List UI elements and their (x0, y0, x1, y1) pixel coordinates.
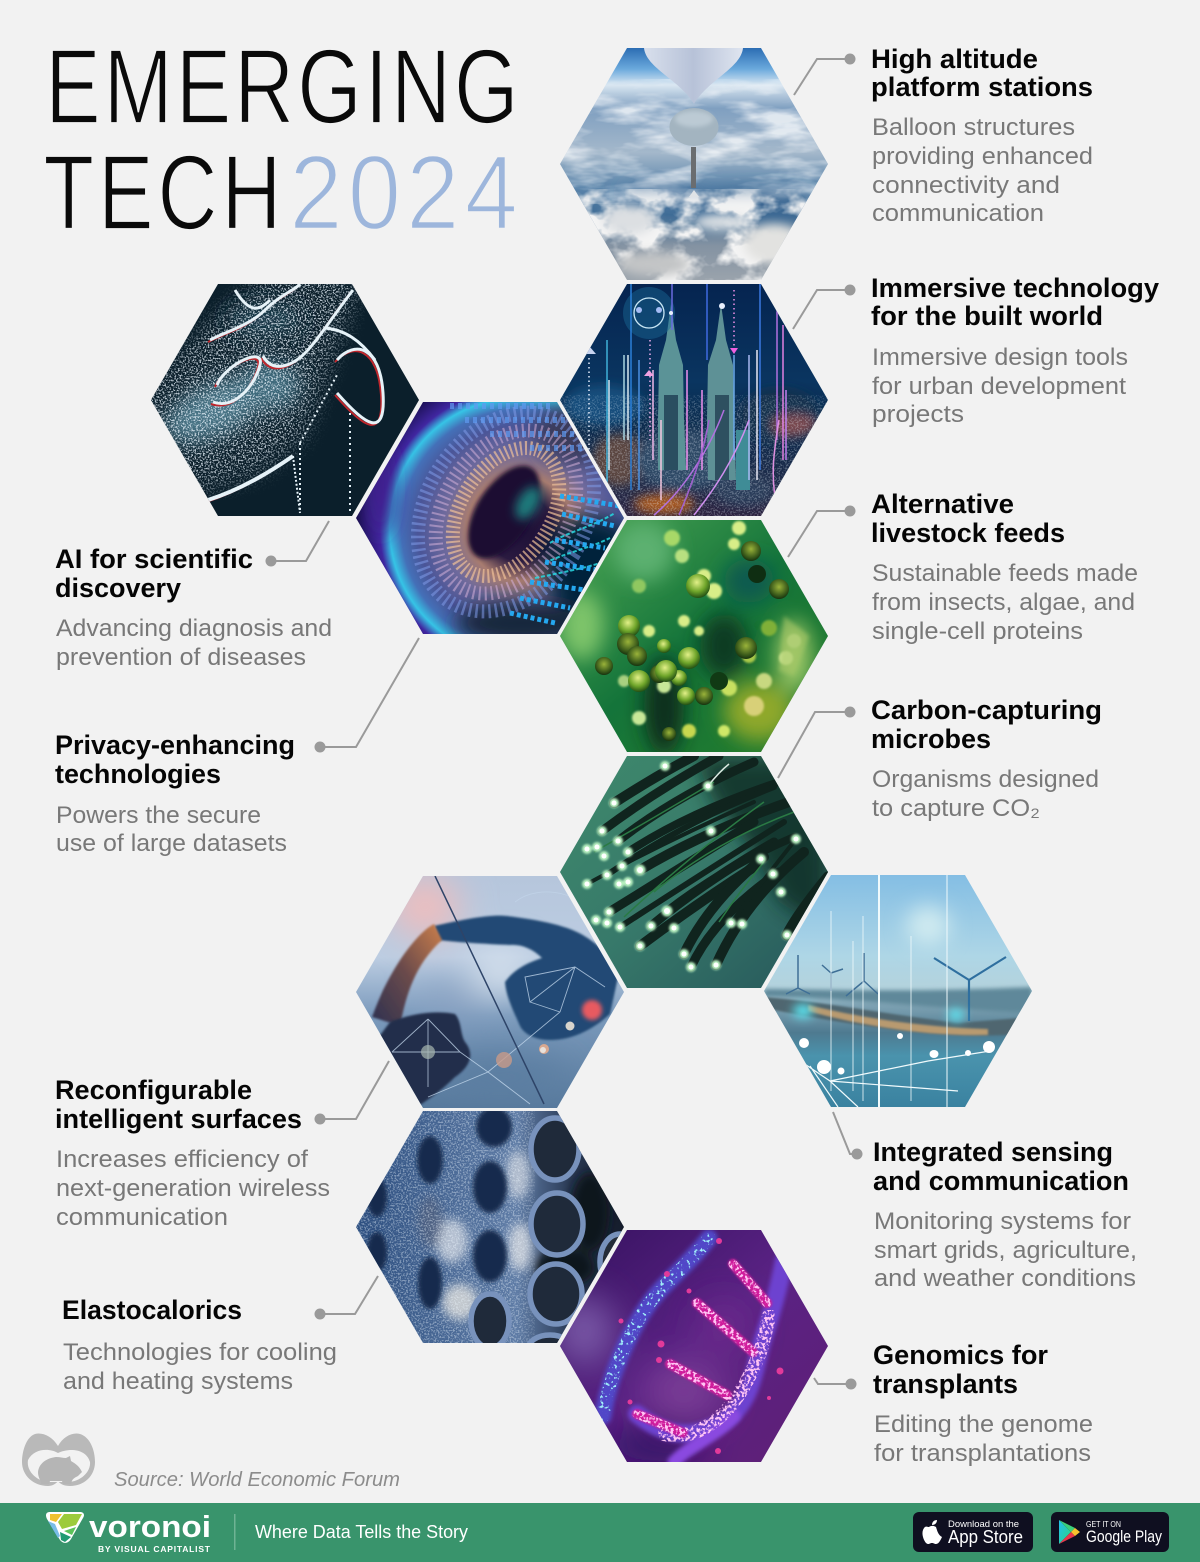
connector (778, 706, 856, 778)
description: for transplantations (874, 1440, 1091, 1467)
title (43, 28, 523, 252)
panel: reconfigurable intelligent surfaces (55, 1061, 389, 1231)
heading (55, 544, 253, 603)
description: and weather conditions (874, 1265, 1136, 1292)
heading: Elastocalorics (62, 1295, 242, 1325)
hexagon image: balloon above the clouds (560, 48, 828, 280)
heading: Alternative (871, 489, 1014, 519)
description (56, 802, 287, 857)
heading: AI for scientific (55, 544, 253, 574)
balloon envelope (644, 48, 743, 104)
data lines (589, 284, 786, 515)
heading: Privacy-enhancing (55, 730, 295, 760)
connector (788, 506, 856, 557)
heading: Genomics for (873, 1340, 1048, 1370)
strand sparkle (603, 1238, 769, 1435)
connector (266, 521, 329, 566)
panel: carbon-capturing microbes (778, 695, 1102, 822)
google play badge (1051, 1512, 1169, 1552)
balloon gondola (670, 108, 718, 197)
hexagon image: AI particle molecule (151, 284, 419, 516)
connector (314, 638, 419, 752)
panel: genomics for transplants (814, 1340, 1093, 1467)
heading: discovery (55, 573, 181, 603)
description: connectivity and (872, 172, 1060, 199)
description (874, 1411, 1093, 1467)
heading: Immersive technology (871, 273, 1159, 303)
heading (871, 695, 1102, 754)
bokeh lights (421, 1000, 602, 1068)
voronoi logo icon (46, 1512, 84, 1543)
description: smart grids, agriculture, (874, 1237, 1137, 1264)
title line: TECH: TECH (43, 134, 286, 252)
coastline (764, 987, 1032, 1035)
heading: microbes (871, 724, 991, 754)
algae bubbles (595, 521, 801, 741)
diagonal glass edge (435, 876, 544, 1104)
description: for urban development (872, 373, 1126, 400)
pipe ends (468, 1115, 622, 1343)
title line: EMERGING: EMERGING (45, 28, 522, 146)
description (874, 1208, 1137, 1292)
description: Increases efficiency of (56, 1146, 308, 1173)
heading: for the built world (871, 301, 1103, 331)
dark holes (367, 1107, 512, 1309)
heading: and communication (873, 1166, 1129, 1196)
heading: technologies (55, 759, 221, 789)
description: Technologies for cooling (63, 1339, 337, 1366)
panel: privacy-enhancing technologies (55, 638, 419, 857)
connector (793, 284, 856, 329)
panel: integrated sensing and communication (833, 1112, 1137, 1292)
description: Sustainable feeds made (872, 560, 1138, 587)
title year: 2024: 2024 (289, 134, 523, 252)
description: projects (872, 401, 964, 428)
description: communication (56, 1204, 228, 1231)
heading (871, 273, 1159, 331)
heading: Reconfigurable (55, 1075, 252, 1105)
source note: Source: World Economic Forum (114, 1469, 400, 1491)
google play badge: Google Play (1086, 1527, 1162, 1546)
helix strands (603, 1238, 784, 1462)
connector (314, 1276, 378, 1320)
glowing strands (206, 286, 381, 502)
description (56, 615, 332, 671)
white network lines (806, 875, 986, 1107)
panel: alternative livestock feeds (788, 489, 1138, 645)
connector (833, 1112, 862, 1160)
description (872, 344, 1128, 428)
connector (814, 1378, 856, 1390)
iris fibres (411, 403, 618, 626)
panel: high altitude platform stations (794, 44, 1093, 227)
app store badge: App Store (948, 1527, 1023, 1547)
description (872, 114, 1093, 227)
description (872, 766, 1099, 822)
heading: Integrated sensing (873, 1137, 1113, 1167)
heading: platform stations (871, 72, 1093, 102)
voronoi wordmark: voronoi (89, 1509, 211, 1544)
twin towers (658, 304, 750, 490)
icon: visual capitalist globe with pig (22, 1434, 95, 1486)
description: Editing the genome (874, 1411, 1093, 1438)
particle cloud (152, 284, 365, 500)
connector (314, 1061, 389, 1124)
description: providing enhanced (872, 143, 1093, 170)
fibre tips (582, 761, 801, 972)
heading: livestock feeds (871, 518, 1065, 548)
panel: elastocalorics (62, 1276, 378, 1395)
divider (234, 1514, 236, 1550)
network lines (392, 892, 610, 1104)
description (63, 1339, 337, 1395)
hexagon image: green algae (560, 520, 828, 752)
description: prevention of diseases (56, 644, 306, 671)
heading (873, 1137, 1129, 1196)
description: and heating systems (63, 1368, 293, 1395)
description: communication (872, 200, 1044, 227)
hexagon image: glowing fibre optics (560, 756, 828, 988)
description: to capture CO₂ (872, 795, 1040, 822)
heading (871, 44, 1093, 102)
heading: transplants (873, 1369, 1018, 1399)
lower hand (380, 1010, 472, 1106)
panel: immersive technology (793, 273, 1159, 428)
pupil (465, 462, 543, 562)
by visual capitalist: BY VISUAL CAPITALIST (98, 1544, 211, 1554)
network nodes (799, 1033, 995, 1074)
app store badge (913, 1512, 1033, 1552)
description: Balloon structures (872, 114, 1075, 141)
left arm (372, 924, 442, 1026)
description: Monitoring systems for (874, 1208, 1131, 1235)
upper hand (434, 916, 618, 1040)
heading: intelligent surfaces (55, 1104, 302, 1134)
hexagon image: frosted pipes (356, 1111, 624, 1343)
description: Organisms designed (872, 766, 1099, 793)
connector (794, 54, 856, 95)
description: next-generation wireless (56, 1175, 330, 1202)
holographic circle (623, 287, 675, 339)
description (872, 560, 1138, 645)
heading (873, 1340, 1048, 1399)
tagline: Where Data Tells the Story (255, 1522, 468, 1542)
description: from insects, algae, and (872, 589, 1135, 616)
hexagon image: smart city towers (560, 284, 828, 516)
description: use of large datasets (56, 830, 287, 857)
heading (871, 489, 1065, 548)
dark fibre strands (587, 756, 828, 967)
description: Immersive design tools (872, 344, 1128, 371)
heading: High altitude (871, 44, 1038, 74)
app store badge: Download on the (948, 1519, 1019, 1530)
base pairs (637, 1264, 767, 1433)
panel: AI for scientific discovery (55, 521, 332, 671)
hexagon image: wind farm network (764, 875, 1032, 1107)
hexagon image: DNA helix (560, 1230, 828, 1462)
description: Advancing diagnosis and (56, 615, 332, 642)
heading (55, 1075, 302, 1134)
heading: Carbon-capturing (871, 695, 1102, 725)
heading (55, 730, 295, 789)
description (56, 1146, 330, 1231)
hexagon image: digital eye (356, 402, 624, 634)
turbines (786, 953, 1006, 1021)
floating droplets (618, 1238, 784, 1454)
description: Powers the secure (56, 802, 261, 829)
description: single-cell proteins (872, 618, 1083, 645)
footer bar (0, 1503, 1200, 1562)
hexagon image: hands touching network (356, 876, 624, 1108)
google play badge: GET IT ON (1086, 1519, 1121, 1529)
